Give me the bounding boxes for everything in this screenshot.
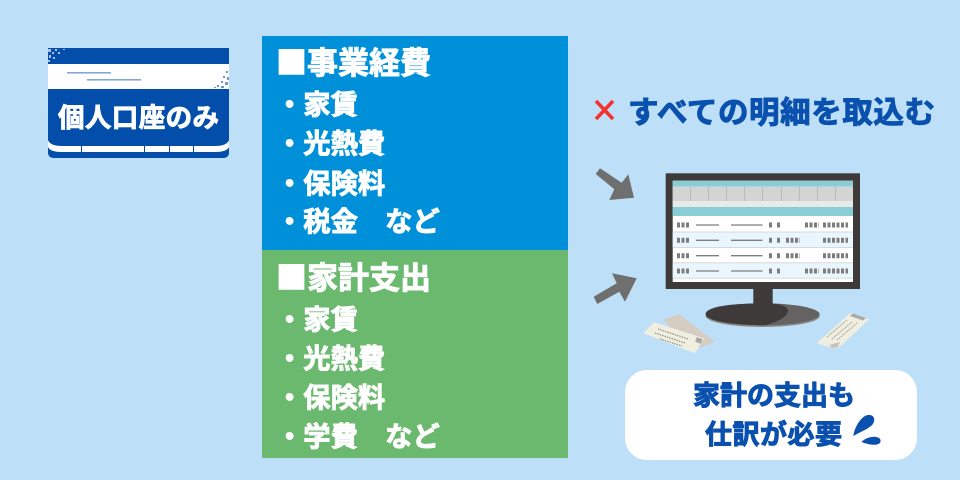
callout [625, 370, 917, 460]
callout: 仕訳が必要 [705, 419, 842, 450]
panel: household spending [262, 250, 568, 458]
icon: emphasis marks [853, 415, 881, 445]
bank card: personal account only [48, 48, 229, 158]
heading: household spending: ■家計支出 [276, 253, 431, 298]
list: household spending items: ・光熱費 [276, 336, 385, 376]
list: household spending items: ・学費 など [276, 414, 440, 454]
arrow: from business panel [596, 168, 634, 200]
panel: business expenses [262, 36, 568, 250]
arrow: from household panel [594, 273, 637, 304]
cross mark [596, 101, 613, 119]
list: household spending items: ・保険料 [276, 375, 385, 415]
receipts: left [643, 314, 715, 353]
monitor screen [673, 181, 853, 282]
list: household spending items: ・家賃 [276, 297, 358, 337]
heading: business expenses: ■事業経費 [276, 38, 431, 83]
list: household spending items [276, 297, 440, 454]
table rows [677, 225, 848, 271]
callout text: 家計の支出も [693, 381, 855, 411]
list: business expense items [276, 82, 440, 239]
list: business expense items: ・光熱費 [276, 121, 385, 161]
list: business expense items: ・家賃 [276, 82, 358, 122]
list: business expense items: ・保険料 [276, 161, 385, 201]
card label: 個人口座のみ [58, 103, 219, 133]
monitor [666, 173, 860, 327]
list: business expense items: ・税金 など [276, 199, 440, 239]
receipts: right [817, 313, 869, 348]
monitor stand [706, 288, 820, 327]
heading: import all transactions: すべての明細を取込む [628, 96, 935, 130]
